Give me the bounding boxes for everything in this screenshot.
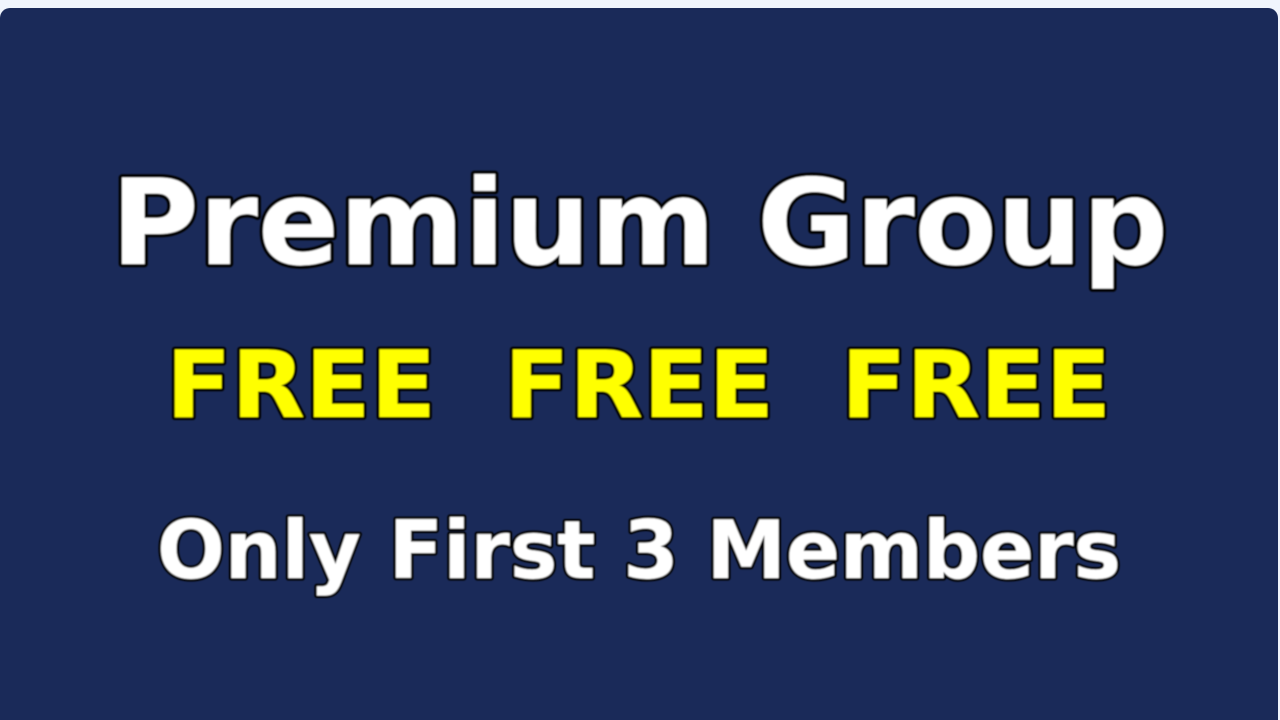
offer row: three FREE labels — [166, 331, 1111, 439]
label: third FREE: FREE — [841, 331, 1111, 439]
label: first FREE: FREE — [166, 331, 436, 439]
heading: Premium Group: Premium Group — [111, 155, 1168, 293]
label: second FREE: FREE — [504, 331, 774, 439]
subheading: Only First 3 Members: Only First 3 Members — [157, 504, 1121, 597]
